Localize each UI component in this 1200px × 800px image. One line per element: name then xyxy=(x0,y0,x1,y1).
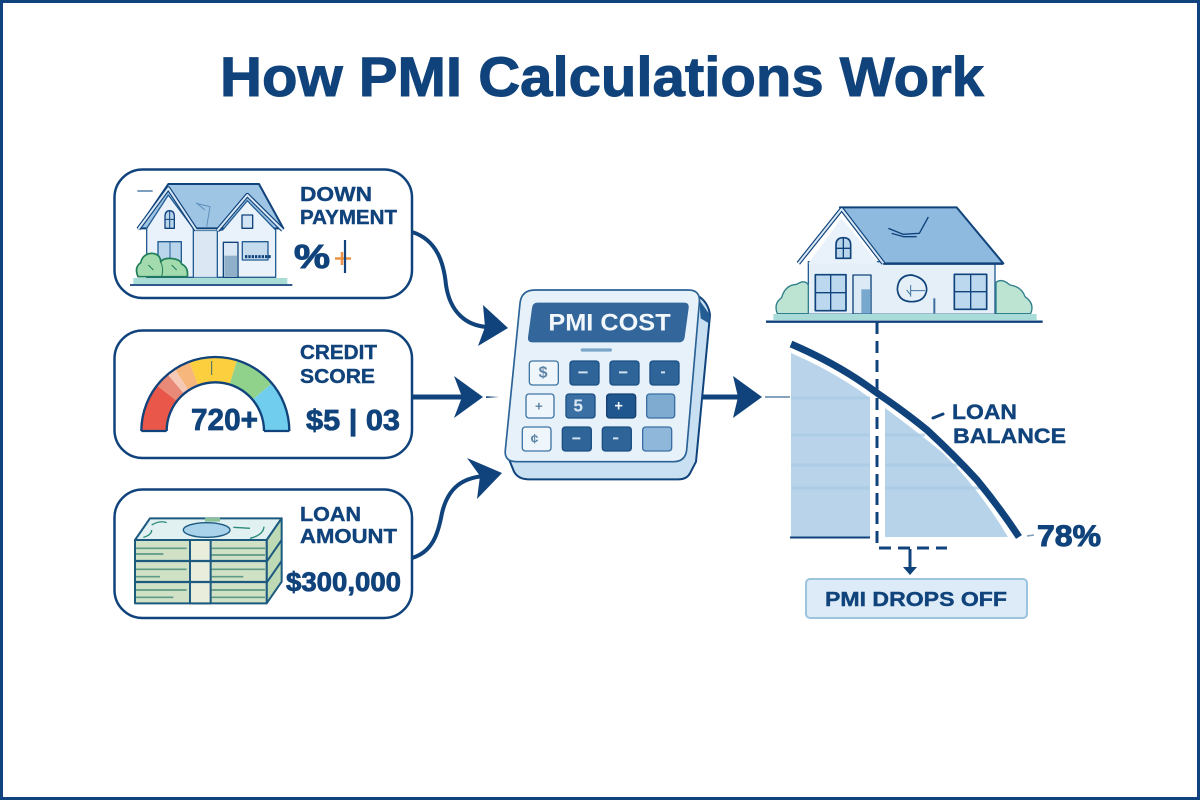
panel: credit score xyxy=(114,330,412,458)
callout: PMI drops off: PMI DROPS OFF xyxy=(825,589,1007,611)
label: loan balance: LOAN xyxy=(952,401,1017,424)
chart: loan balance curve xyxy=(790,344,1034,538)
arrow: dashed line to PMI drops off xyxy=(903,549,917,575)
label: loan balance xyxy=(952,401,1066,448)
title: How PMI Calculations Work xyxy=(220,45,985,108)
plus mark and divider xyxy=(335,240,351,273)
arrow: loan amount to calculator xyxy=(412,458,502,558)
arrow: calculator to chart xyxy=(702,376,790,418)
screen indicator xyxy=(581,348,612,352)
calculator side shade xyxy=(699,300,710,323)
panel: loan amount xyxy=(114,490,412,618)
icon: credit gauge xyxy=(141,357,289,431)
small tick to 78 percent xyxy=(1027,535,1034,536)
dashed PMI cutoff line xyxy=(877,322,947,548)
calculator face xyxy=(505,290,699,462)
panel outline xyxy=(114,170,412,298)
calculator: PMI cost xyxy=(505,290,710,479)
keypad: $ xyxy=(539,365,548,382)
panel outline xyxy=(114,330,412,458)
keypad: ¢ xyxy=(531,430,539,446)
area after PMI cutoff xyxy=(885,408,1008,537)
keypad: + xyxy=(614,399,623,415)
small tick to label xyxy=(933,414,943,418)
keypad: 5 xyxy=(573,395,583,415)
keypad: + xyxy=(535,399,543,414)
panel outline xyxy=(114,490,412,618)
icon: house on timeline xyxy=(766,207,1043,322)
label: loan: LOAN xyxy=(300,504,361,526)
arrow: down payment to calculator xyxy=(412,232,508,346)
label: loan balance: BALANCE xyxy=(953,425,1066,448)
chart shading bands xyxy=(791,398,980,488)
loan balance line xyxy=(791,344,1019,537)
label: score: SCORE xyxy=(300,366,375,388)
score value: 720+ xyxy=(191,402,258,437)
label: amount: AMOUNT xyxy=(300,526,397,548)
screen text: PMI COST xyxy=(548,310,671,337)
loan value: $300,000 xyxy=(286,567,401,597)
panel: down payment xyxy=(114,170,412,298)
label: 78 percent: 78% xyxy=(1037,520,1101,553)
callout: PMI drops off xyxy=(806,579,1027,618)
icon: cash stack xyxy=(135,518,282,603)
icon: house with two gables xyxy=(130,184,292,285)
label: credit: CREDIT xyxy=(300,342,377,364)
label: payment: PAYMENT xyxy=(300,207,397,229)
label: down payment: DOWN xyxy=(300,184,372,206)
calculator body depth xyxy=(506,295,710,479)
keypad xyxy=(522,361,679,451)
calculator screen xyxy=(528,303,689,342)
chart baseline xyxy=(790,536,870,538)
area before PMI cutoff xyxy=(791,353,870,537)
percent symbol: % xyxy=(294,238,330,275)
arrow: credit score to calculator xyxy=(412,376,499,418)
monthly cost value: $5 | 03 xyxy=(306,405,400,437)
